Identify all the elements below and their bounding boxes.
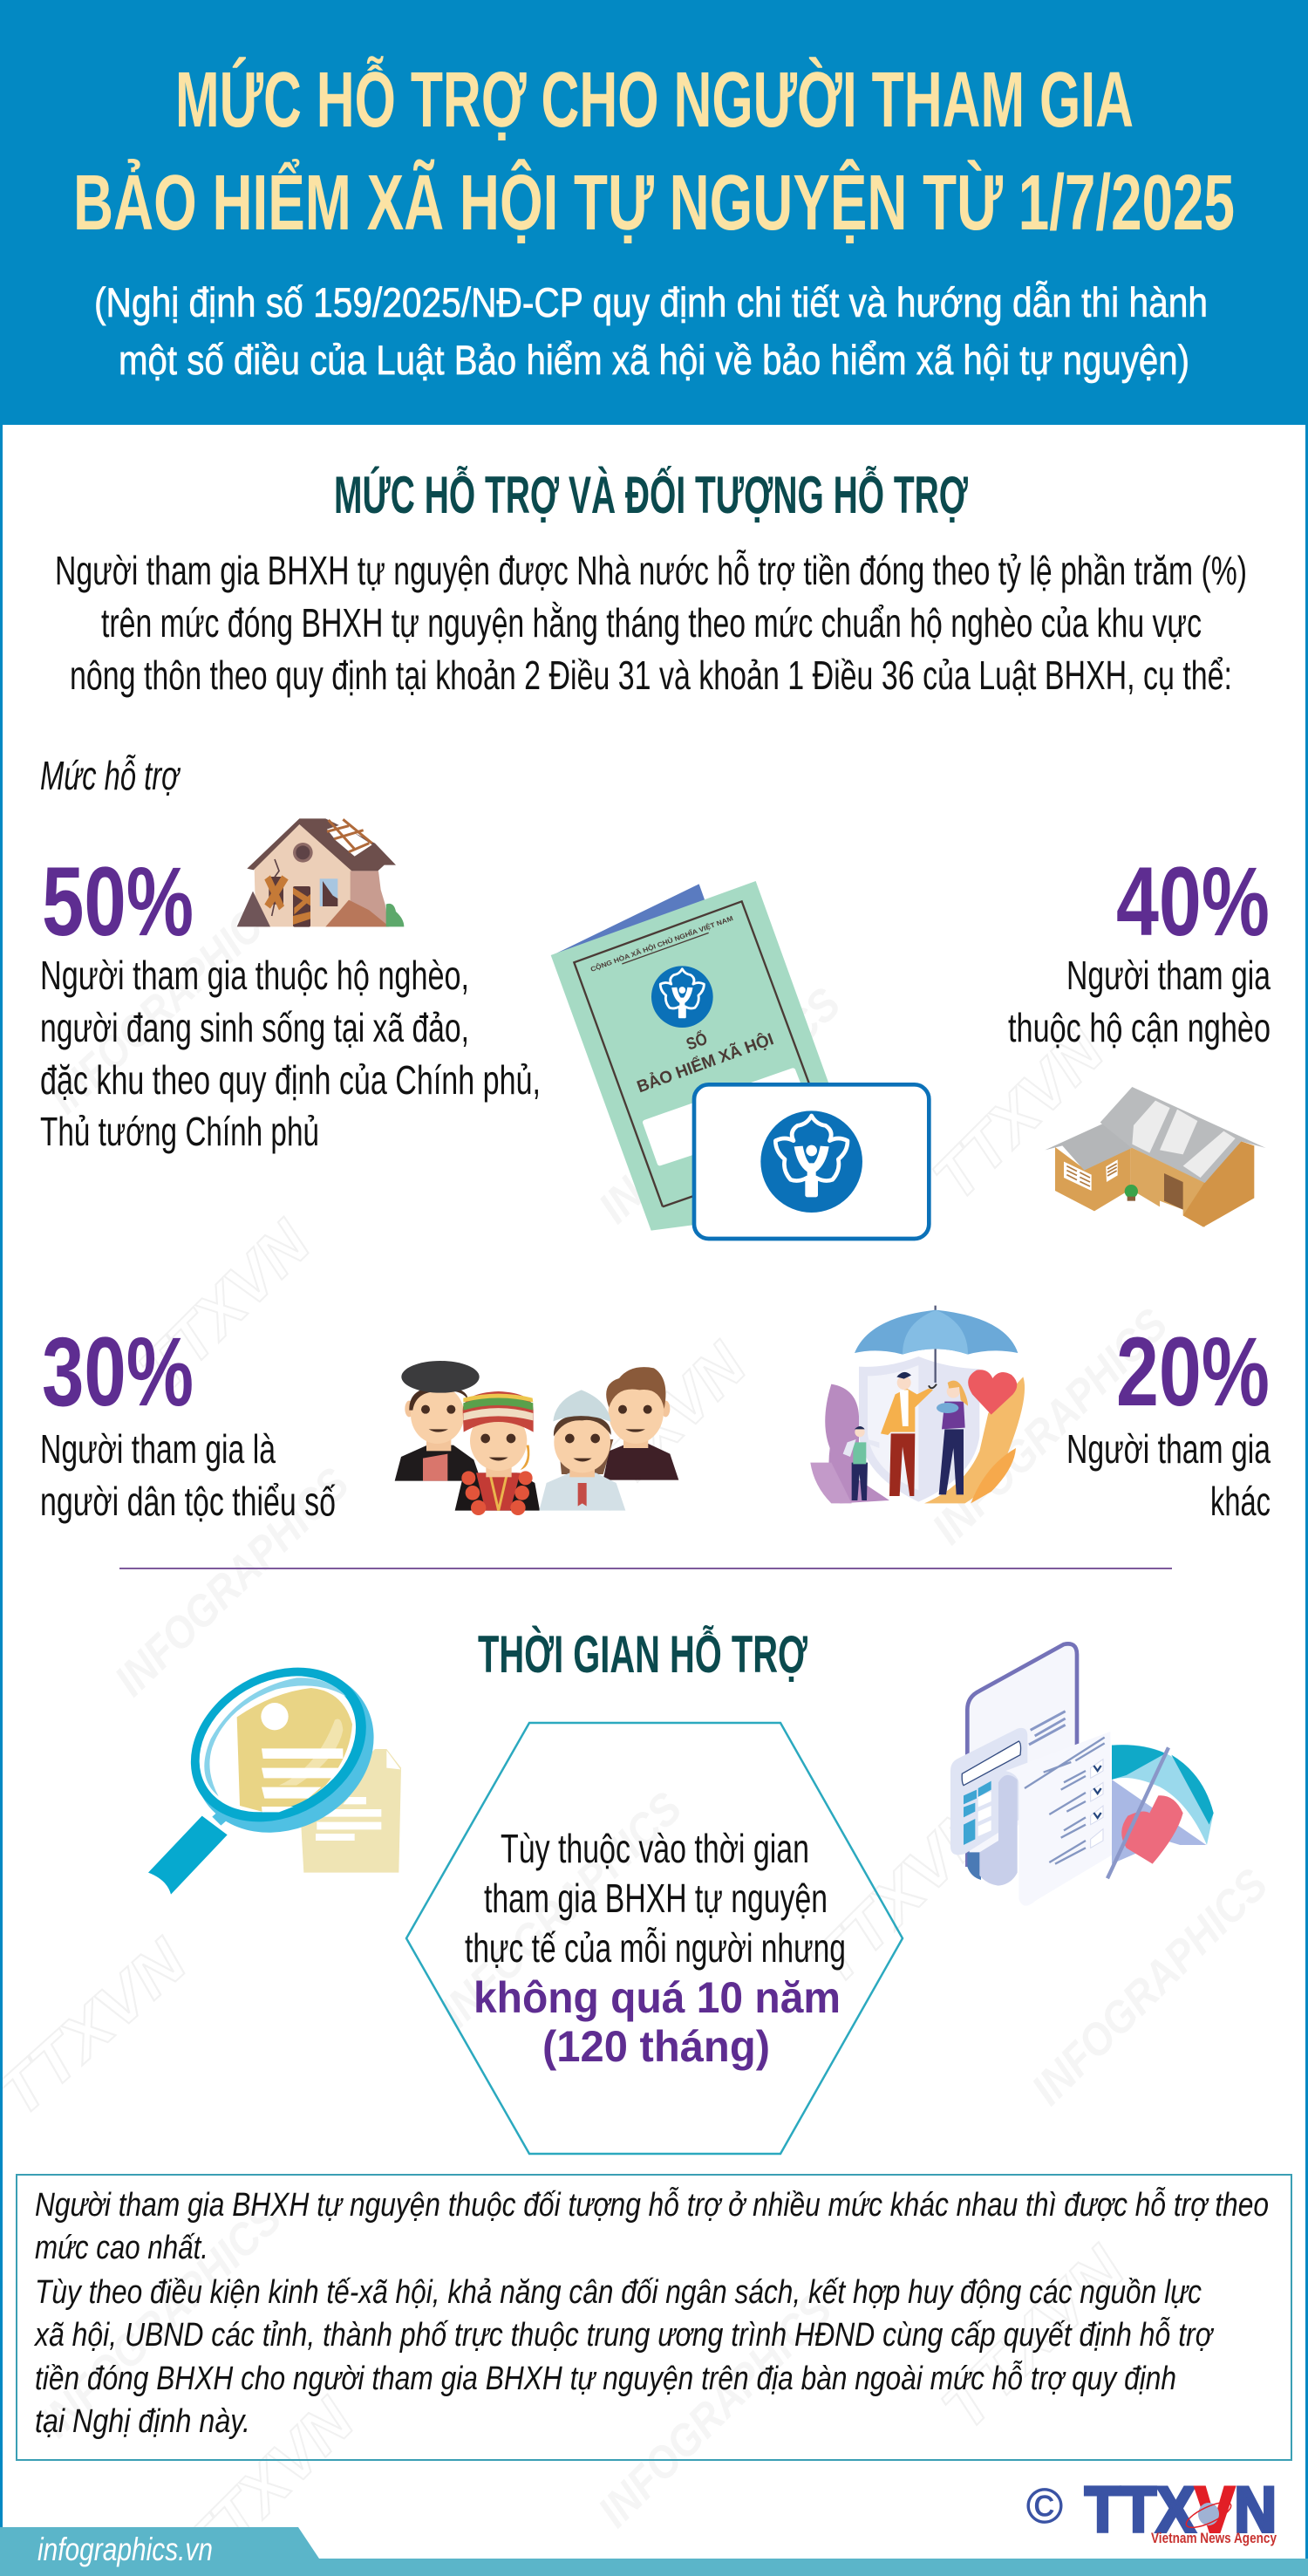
watermarks: INFOGRAPHICS [923,1299,1178,1554]
title [73,55,1235,247]
icon: tablet, calculator, checklist, umbrella [950,1643,1214,1906]
block: 40 percent: 40% [1116,847,1270,956]
hexagon text: Tùy thuộc vào thời gian [501,1826,809,1871]
note text: tại Nghị định này. [35,2403,250,2440]
block: 50 percent: đặc khu theo quy định của Chính phủ, [40,1057,541,1103]
footer band [0,2527,1308,2576]
heart [1121,1795,1183,1864]
block: 30 percent [40,1317,336,1524]
watermarks: INFOGRAPHICS [589,979,851,1233]
block: 20 percent [1066,1317,1271,1524]
man in beret [395,1361,481,1481]
hexagon text [465,1826,846,2071]
block: 30 percent: người dân tộc thiểu số [40,1479,336,1524]
watermarks: TTXVN [929,2232,1140,2443]
cover frame [574,901,809,1206]
man [881,1372,933,1496]
purple leaves [825,1384,889,1503]
watermarks: TTXVN [562,1329,760,1527]
back document [301,1749,401,1873]
note text: mức cao nhất. [35,2230,208,2266]
card [694,1084,929,1239]
illustration: social insurance book and card [551,881,929,1239]
woman with baby [937,1381,968,1494]
block: 30 percent: 30% [42,1317,194,1426]
icon: magnifying glass over documents [148,1636,404,1895]
calculator [950,1728,1027,1855]
book title: BẢO HIỂM XÃ HỘI [634,1028,776,1097]
block: 50 percent: Thủ tướng Chính phủ [40,1109,319,1154]
watermarks: INFOGRAPHICS [106,1459,359,1706]
icon: poor house [1045,1087,1266,1227]
man with brown hair [603,1367,678,1480]
book title: SỔ [683,1028,710,1055]
block: 50 percent: người đang sinh sống tại xã đảo, [40,1005,469,1050]
woman with striped hat [455,1391,540,1515]
heading: support levels: MỨC HỖ TRỢ VÀ ĐỐI TƯỢNG HỖ TRỢ [334,466,969,524]
watermarks: INFOGRAPHICS [40,884,291,1124]
block: 50 percent: 50% [42,847,194,956]
shield [859,1356,979,1502]
orange leaves [924,1377,1025,1503]
panel: note box [17,2175,1291,2460]
boy [843,1426,879,1500]
icon: damaged house [237,818,404,927]
tablet [967,1643,1077,1880]
watermarks [0,884,1277,2576]
hexagon text: (120 tháng) [542,2022,770,2071]
icon: ethnic minority people [395,1361,678,1515]
logo: TTXVN: © [1026,2478,1063,2534]
watermarks: INFOGRAPHICS [589,2284,842,2537]
watermarks: INFOGRAPHICS [31,2193,292,2448]
watermarks: INFOGRAPHICS [431,1783,692,2038]
checklist paper [979,1732,1112,1906]
label: support level: Mức hỗ trợ [40,753,181,798]
handle [148,1812,228,1895]
cover header text: CỘNG HÒA XÃ HỘI CHỦ NGHĨA VIỆT NAM [589,914,734,974]
subtitle [94,279,1208,383]
watermarks: TTXVN [920,1015,1118,1213]
panel: header [0,0,1308,425]
heart [968,1370,1017,1415]
heading: support duration: THỜI GIAN HỖ TRỢ [478,1625,808,1684]
umbrella [1112,1745,1214,1864]
watermarks: INFOGRAPHICS [1022,1860,1277,2115]
hexagon text: tham gia BHXH tự nguyện [484,1876,828,1921]
woman with white cap [539,1390,625,1511]
hexagon text: thực tế của mỗi người nhưng [465,1925,846,1971]
icon: family under umbrella [810,1306,1025,1503]
intro paragraph [55,548,1247,698]
block: 30 percent: Người tham gia là [40,1426,276,1472]
watermarks: TTXVN [126,1207,324,1405]
small logo [651,966,713,1028]
back cover [552,884,705,955]
front cover [551,881,831,1231]
umbrella [855,1306,1018,1388]
hexagon text: không quá 10 năm [473,1973,841,2022]
lens ring [163,1636,404,1864]
note text [33,2185,1269,2440]
block: 50 percent [40,847,541,1154]
block: 40 percent [1008,847,1271,1050]
logo: TTXVN: Vietnam News Agency [1151,2530,1277,2546]
block: 20 percent: khác [1210,1479,1271,1524]
panel: support duration hexagon [406,1723,903,2154]
footer website: infographics.vn [37,2532,213,2567]
lens document [237,1688,352,1812]
block: 50 percent: Người tham gia thuộc hộ nghèo, [40,953,469,998]
watermarks: TTXVN [798,1787,1009,1999]
logo: TTXVN: TTXVN [1085,2475,1277,2545]
block: 20 percent: 20% [1116,1317,1270,1426]
